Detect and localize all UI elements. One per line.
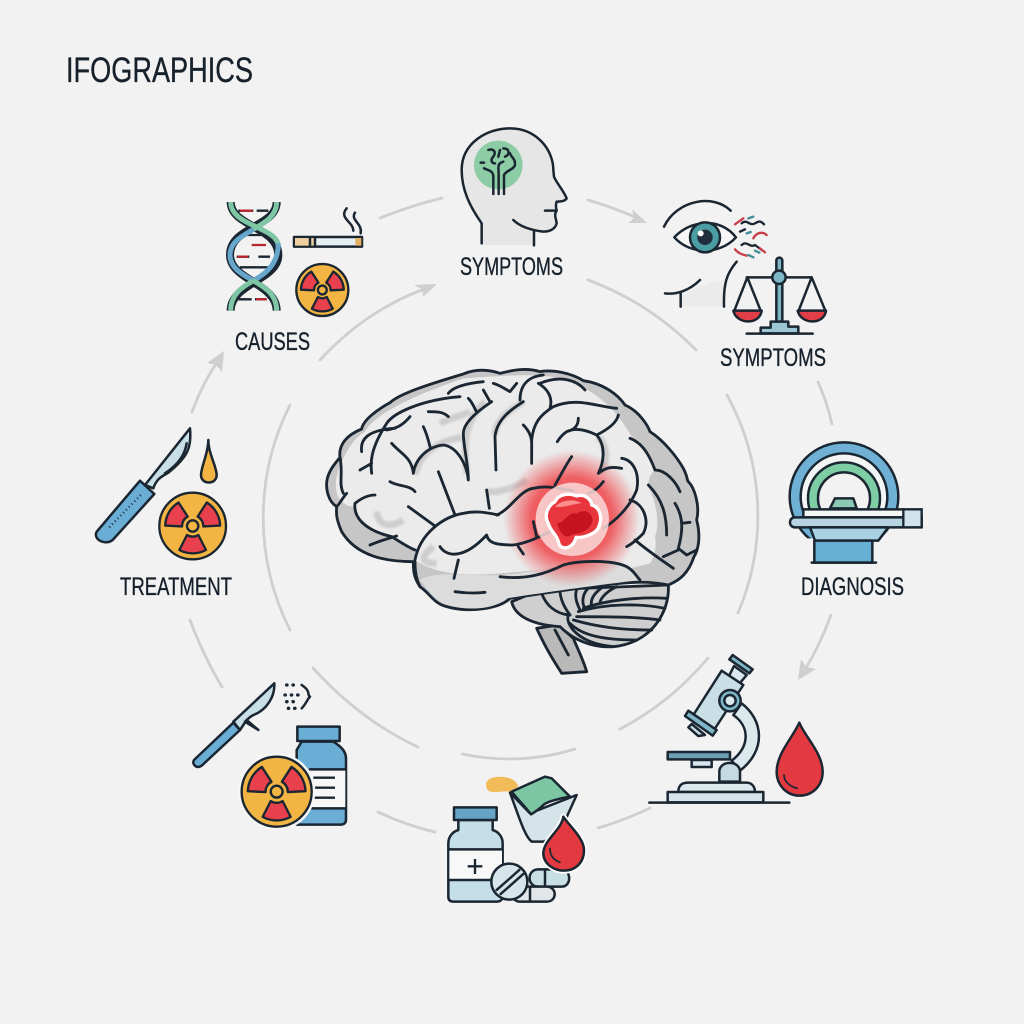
- symptoms icon group: [664, 201, 826, 334]
- icon: radiation: [296, 264, 348, 316]
- cerebrum light surface: [336, 375, 657, 575]
- icon: balance scale: [733, 258, 826, 334]
- icon: round pill: [491, 864, 527, 900]
- icon: cup: [510, 793, 577, 842]
- cerebellum and stem: [512, 585, 668, 673]
- icon: radiation: [159, 493, 226, 559]
- tumor halo: [536, 483, 609, 556]
- icon: capsules: [512, 869, 569, 902]
- sulci: [337, 375, 697, 593]
- icon: scalpel: [96, 428, 190, 542]
- icon: blood drop: [777, 723, 823, 796]
- icon: microscope: [649, 655, 789, 803]
- icon: oil drop: [201, 440, 217, 482]
- inner cycle arrows: [263, 280, 758, 759]
- icon: blue bottle: [297, 727, 346, 825]
- medication icon group: [448, 777, 584, 902]
- icon: vision squiggles: [740, 222, 764, 250]
- icon: MRI scanner: [790, 442, 922, 563]
- label: treatment: TREATMENT: [120, 573, 232, 601]
- icon: radiation: [238, 753, 315, 830]
- central brain illustration: [327, 369, 699, 673]
- label: symptoms top: SYMPTOMS: [460, 253, 563, 281]
- temporal lower band: [420, 561, 640, 608]
- icon: eye: [674, 222, 736, 252]
- icon: particles: [285, 685, 310, 708]
- icon: scalpel small: [193, 683, 274, 767]
- label: diagnosis: DIAGNOSIS: [801, 573, 904, 601]
- icon: cigarette: [294, 208, 362, 247]
- label: causes: CAUSES: [235, 328, 310, 356]
- icon: yellow spill: [486, 777, 518, 792]
- causes icon group: [230, 202, 362, 316]
- cerebrum outline: [327, 369, 699, 610]
- cerebrum shading: [377, 402, 606, 563]
- icon: medicine bottle: [448, 807, 503, 902]
- treatment icon group: [96, 428, 226, 559]
- therapy icon group: [193, 683, 346, 830]
- icon: green wrapper: [512, 777, 570, 814]
- tumor: [546, 494, 601, 548]
- icon: head with brain: [462, 128, 567, 245]
- icon: blood drop on cup: [543, 817, 584, 871]
- diagnosis tools group: [649, 655, 823, 803]
- label: symptoms right: SYMPTOMS: [720, 344, 826, 372]
- icon: DNA helix: [230, 202, 278, 311]
- title: IFOGRAPHICS: [66, 51, 253, 90]
- face sketch: [664, 201, 737, 307]
- tumor glow: [503, 450, 640, 587]
- outer cycle arrows: [190, 198, 832, 832]
